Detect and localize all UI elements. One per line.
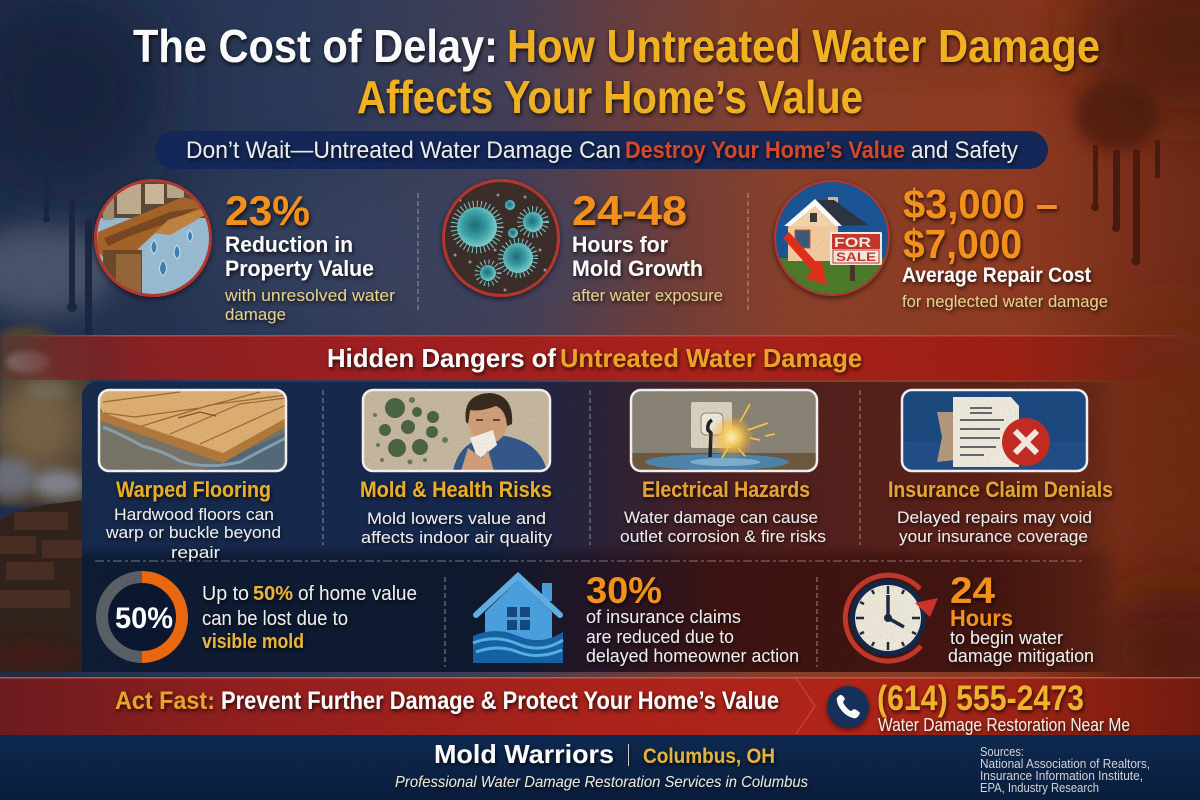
stat value: 23% xyxy=(225,187,310,234)
stat: 24 hours to begin mitigation: damage mitigation xyxy=(948,646,1094,666)
drips: left xyxy=(43,150,93,336)
card: electrical hazards: Water damage can cause xyxy=(624,508,818,527)
stat: 23% reduction in property value: damage xyxy=(225,305,286,324)
stat: 24-48 hours for mold growth: after water exposure xyxy=(572,286,723,305)
call to action banner: Act Fast: xyxy=(115,687,215,715)
sources: National Association of Realtors, xyxy=(980,756,1150,771)
sources: Sources: xyxy=(980,744,1024,759)
stat: 23% reduction in property value: Property Value xyxy=(225,256,374,281)
phone number xyxy=(877,679,1130,735)
card: electrical hazards: outlet corrosion & fire risks xyxy=(620,527,826,546)
chart: 50% donut xyxy=(102,577,182,657)
stat: 24-48 hours for mold growth xyxy=(440,178,723,305)
card: warped flooring: Warped Flooring xyxy=(116,477,271,502)
drips: right xyxy=(1075,79,1160,266)
image: man sneezing near mold xyxy=(363,390,550,471)
icon: flooded house xyxy=(473,576,563,663)
call to action banner: Prevent Further Damage & Protect Your Home’s Value xyxy=(221,687,779,715)
stat value: 24-48 xyxy=(572,187,687,234)
icon: house for sale with down arrow: SALE xyxy=(836,250,876,264)
card: warped flooring: warp or buckle beyond xyxy=(105,523,281,542)
card: electrical hazards xyxy=(620,390,826,546)
stat: 30% of insurance claims reduced: of insurance claims xyxy=(586,607,741,627)
stat: 23% reduction in property value: Reduction in xyxy=(225,232,353,257)
brand: Mold Warriors xyxy=(434,739,614,769)
section banner: hidden dangers: Untreated Water Damage xyxy=(560,343,862,373)
sources: Insurance Information Institute, xyxy=(980,768,1143,783)
stat: 50% home value lost: 50% xyxy=(253,583,293,605)
card: insurance claim denials: Insurance Claim Denials xyxy=(888,477,1113,502)
stat value: $3,000 – xyxy=(903,181,1058,227)
footer xyxy=(0,735,1200,800)
subtitle pill xyxy=(155,131,1048,169)
call to action banner xyxy=(0,677,1200,735)
subtitle pill: and Safety xyxy=(911,137,1018,164)
title: The Cost of Delay: xyxy=(133,20,498,72)
stat: 50% home value lost xyxy=(102,577,417,657)
phone number: (614) 555-2473 xyxy=(877,679,1084,718)
card: warped flooring: repair xyxy=(171,543,220,562)
stat: 24-48 hours for mold growth: Mold Growth xyxy=(572,256,703,281)
image: denied claim document xyxy=(902,390,1087,471)
stat: 23% reduction in property value: with unresolved water xyxy=(224,286,395,305)
image: sparking outlet above puddle xyxy=(631,390,817,471)
stat: repair cost: Average Repair Cost xyxy=(902,264,1091,287)
image: warped wood floor xyxy=(99,390,286,471)
stat: 30% of insurance claims reduced: 30% xyxy=(586,570,662,611)
icon: phone xyxy=(827,686,869,728)
sources xyxy=(980,744,1150,795)
brand xyxy=(395,739,808,791)
title: How Untreated Water Damage xyxy=(507,20,1100,72)
subtitle pill: Don’t Wait—Untreated Water Damage Can xyxy=(186,137,621,164)
icon: rotted wood with water drops xyxy=(92,178,214,302)
title: Affects Your Home’s Value xyxy=(357,71,863,123)
stat: 24 hours to begin mitigation xyxy=(845,570,1094,666)
stat: repair cost: $7,000 xyxy=(903,221,1022,267)
section banner: hidden dangers: Hidden Dangers of xyxy=(327,343,556,373)
card: insurance claim denials: your insurance coverage xyxy=(899,527,1088,546)
stat: 23% reduction in property value xyxy=(90,175,395,324)
card: mold and health risks: affects indoor air quality xyxy=(361,528,553,547)
card: mold and health risks: Mold lowers value and xyxy=(367,509,546,528)
title xyxy=(133,20,1100,123)
card: insurance claim denials xyxy=(888,390,1113,546)
stat: 50% home value lost: visible mold xyxy=(202,631,304,653)
section banner: hidden dangers xyxy=(0,335,1200,380)
stat: 24 hours to begin mitigation: 24 xyxy=(950,570,995,611)
stat: 50% home value lost: of home value xyxy=(298,583,417,605)
card: warped flooring: Hardwood floors can xyxy=(114,505,274,524)
stat: 30% of insurance claims reduced: are reduced due to xyxy=(586,627,734,647)
panel: hidden dangers cards and stats xyxy=(82,382,1122,672)
icon: mold spores xyxy=(440,178,562,300)
phone number: Water Damage Restoration Near Me xyxy=(878,715,1130,735)
stat: 24 hours to begin mitigation: to begin water xyxy=(950,628,1063,648)
chart: 50% donut: 50% xyxy=(115,602,173,635)
stat: 30% of insurance claims reduced xyxy=(473,570,799,666)
stat: 24-48 hours for mold growth: Hours for xyxy=(572,232,668,257)
sources: EPA, Industry Research xyxy=(980,780,1099,795)
card: warped flooring xyxy=(99,390,286,562)
stat: 50% home value lost: can be lost due to xyxy=(202,608,348,630)
brand: Professional Water Damage Restoration Services in Columbus xyxy=(395,774,808,791)
stat: repair cost xyxy=(770,178,1108,311)
icon: house for sale with down arrow xyxy=(770,178,895,303)
subtitle pill: Destroy Your Home’s Value xyxy=(625,137,905,164)
left wall: exposed brick xyxy=(0,500,85,672)
stat: 50% home value lost: Up to xyxy=(202,583,249,605)
icon: house for sale with down arrow: FOR xyxy=(834,234,871,250)
stat: 24 hours to begin mitigation: Hours xyxy=(950,605,1013,631)
stat: repair cost: for neglected water damage xyxy=(902,292,1108,311)
icon: clock with arrow xyxy=(845,575,938,661)
stat: 30% of insurance claims reduced: delayed homeowner action xyxy=(586,646,799,666)
card: electrical hazards: Electrical Hazards xyxy=(642,477,810,502)
card: mold and health risks xyxy=(360,390,553,547)
left wall: stained plaster xyxy=(0,325,90,505)
card: insurance claim denials: Delayed repairs may void xyxy=(897,508,1092,527)
card: mold and health risks: Mold & Health Risks xyxy=(360,477,552,502)
brand: Columbus, OH xyxy=(643,745,775,768)
